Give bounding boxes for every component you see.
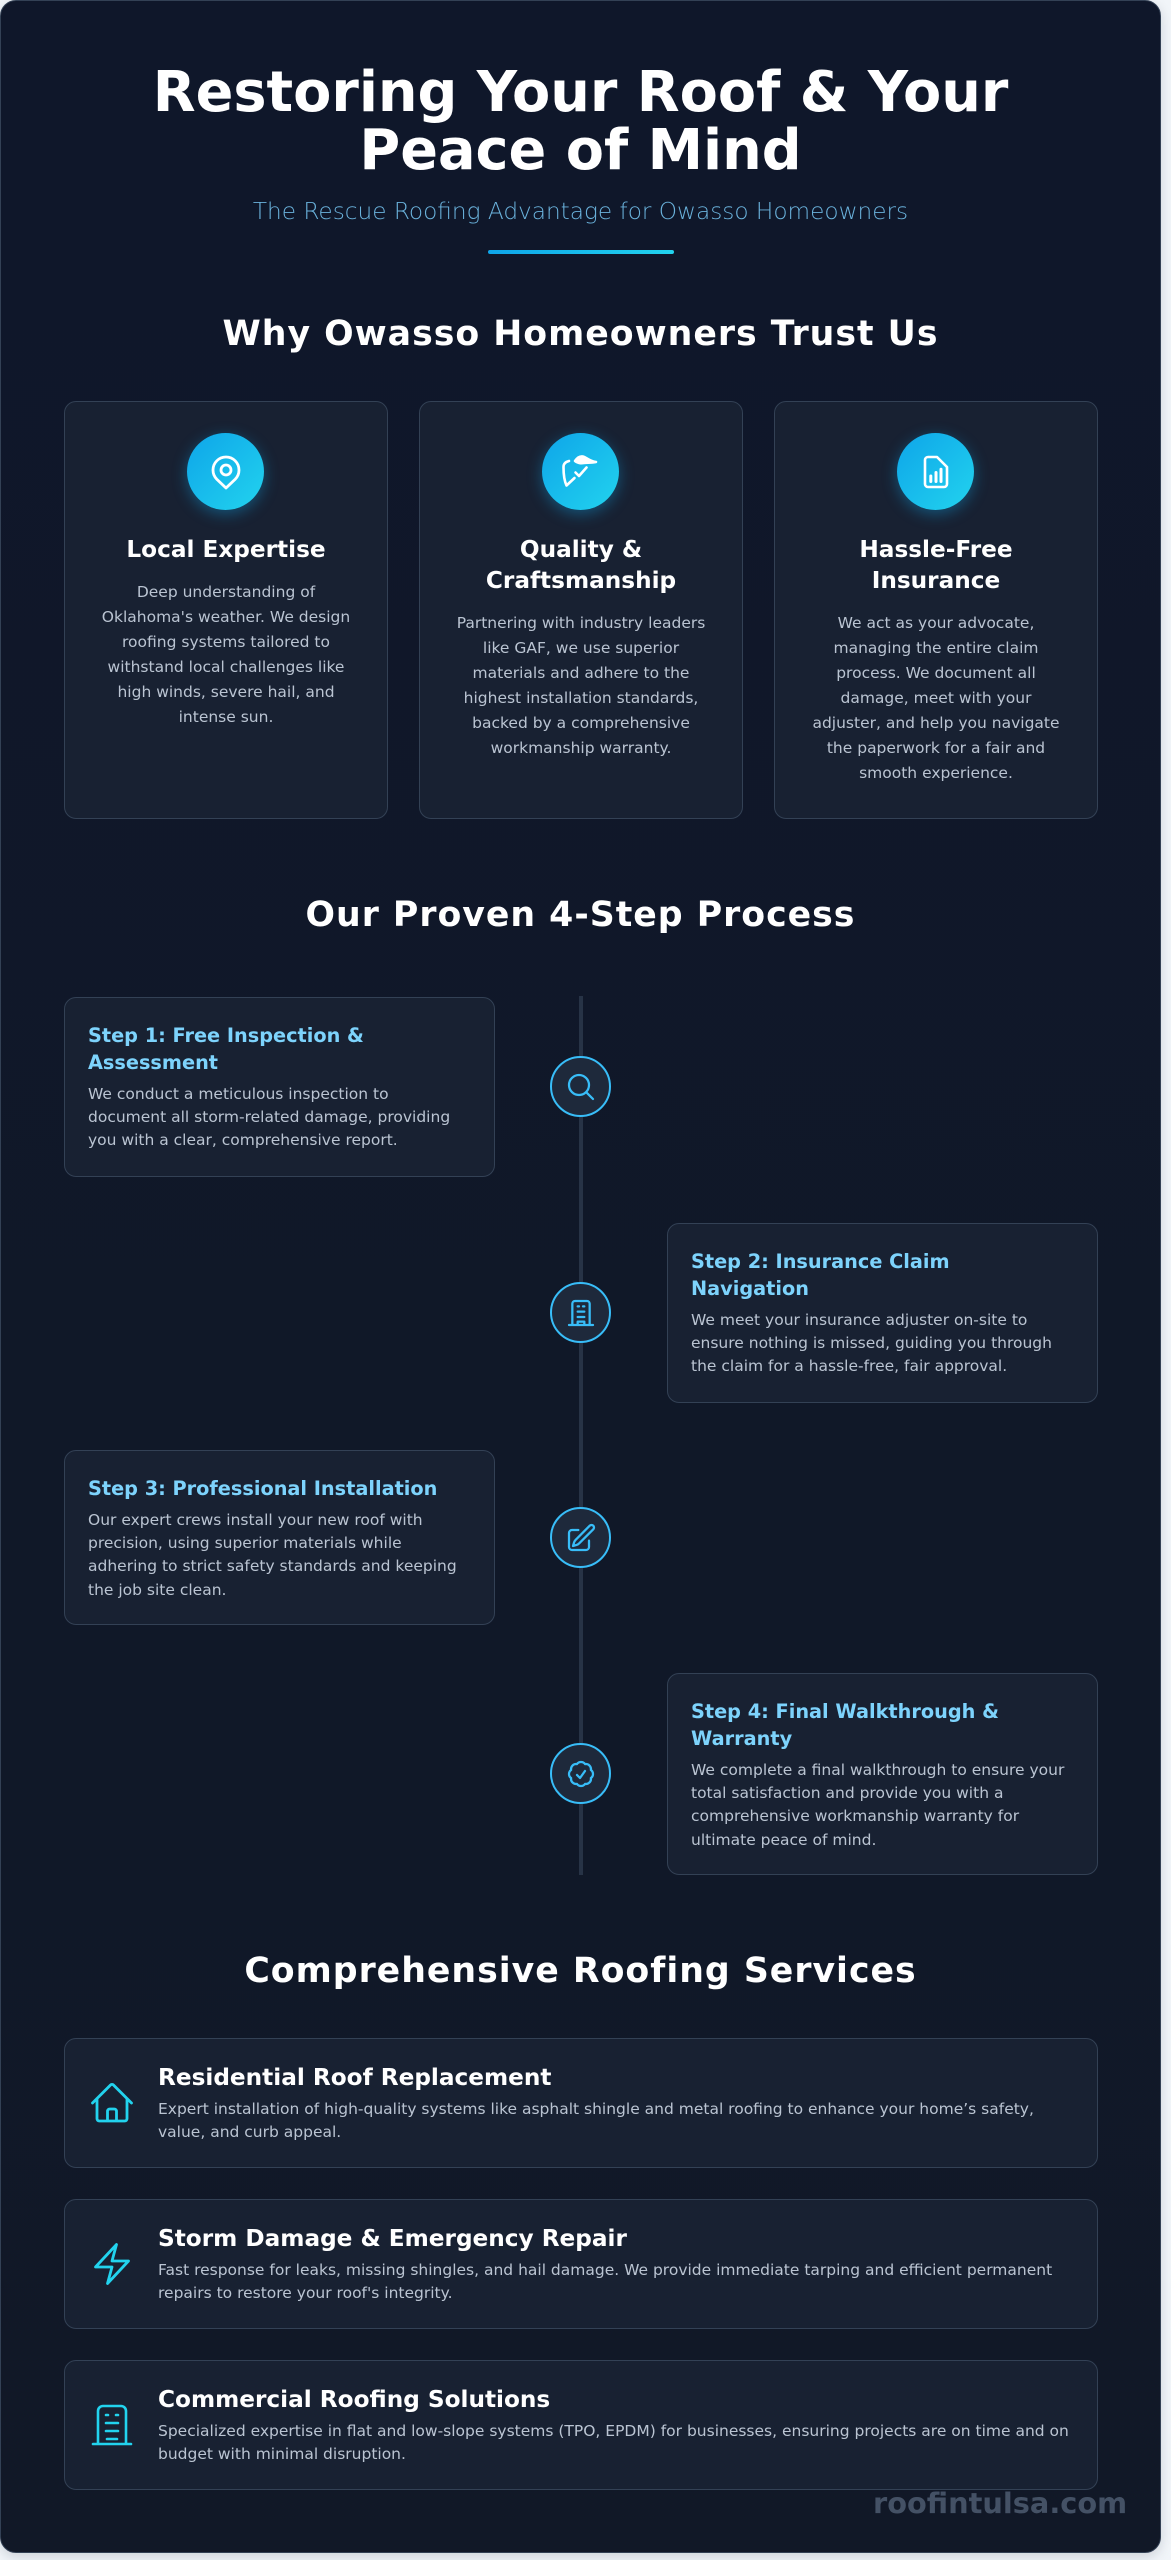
step text: the job site clean. — [88, 1581, 226, 1599]
service title: Commercial Roofing Solutions — [158, 2386, 550, 2413]
step title — [691, 1700, 999, 1750]
step text — [88, 1085, 450, 1149]
panel: hassle-free insurance — [774, 401, 1098, 819]
step 1 node: search icon — [550, 1056, 611, 1117]
title: Restoring Your Roof & Your — [153, 60, 1008, 125]
service text: Fast response for leaks, missing shingles, and hail damage. We provide immediate tarping and efficient permanent — [158, 2261, 1052, 2279]
card text: workmanship warranty. — [491, 739, 671, 757]
card text: materials and adhere to the — [473, 664, 689, 682]
step title: Assessment — [88, 1051, 218, 1074]
step 3 node: pencil icon — [550, 1507, 611, 1568]
icon: document with bar chart — [897, 433, 974, 510]
service title: Residential Roof Replacement — [158, 2064, 551, 2091]
card text: We act as your advocate, — [838, 614, 1034, 632]
icon: shield with roof and check — [542, 433, 619, 510]
card text: highest installation standards, — [464, 689, 698, 707]
step text: you with a clear, comprehensive report. — [88, 1131, 398, 1149]
card text: roofing systems tailored to — [122, 633, 330, 651]
step text — [691, 1761, 1064, 1849]
card text: adjuster, and help you navigate — [812, 714, 1060, 732]
step title: Step 4: Final Walkthrough & — [691, 1700, 999, 1722]
step text: the claim for a hassle-free, fair approval. — [691, 1357, 1007, 1375]
step title: Step 1: Free Inspection & — [88, 1024, 364, 1047]
service text — [158, 2261, 1052, 2302]
icon: lightning bolt — [94, 2243, 130, 2285]
card heading: Hassle-Free — [859, 536, 1013, 563]
card text — [457, 614, 705, 757]
card text: damage, meet with your — [840, 689, 1032, 707]
card text: high winds, severe hail, and — [117, 683, 335, 701]
step text: comprehensive workmanship warranty for — [691, 1807, 1019, 1825]
card text: smooth experience. — [859, 764, 1013, 782]
title: Peace of Mind — [359, 118, 802, 183]
heading: process: Our Proven 4-Step Process — [306, 895, 855, 935]
card text: Deep understanding of — [137, 582, 315, 600]
step text: We complete a final walkthrough to ensure your — [691, 1761, 1064, 1779]
card text: managing the entire claim — [834, 639, 1038, 657]
watermark: roofintulsa.com — [873, 2486, 1127, 2520]
card heading: Craftsmanship — [486, 567, 676, 594]
card text: the paperwork for a fair and — [827, 739, 1045, 757]
service text: repairs to restore your roof's integrity. — [158, 2284, 452, 2302]
card text: Partnering with industry leaders — [457, 614, 705, 632]
step text: ultimate peace of mind. — [691, 1831, 876, 1849]
card text: intense sun. — [179, 708, 273, 726]
service text — [158, 2100, 1034, 2141]
step text: We meet your insurance adjuster on-site to — [691, 1311, 1027, 1329]
heading: services: Comprehensive Roofing Services — [244, 1951, 917, 1991]
icon: map pin — [187, 433, 264, 510]
card heading: Quality & — [520, 536, 642, 563]
card heading — [859, 536, 1013, 594]
step title: Warranty — [691, 1726, 792, 1750]
step text: document all storm-related damage, providing — [88, 1108, 450, 1126]
step 4 card — [667, 1673, 1098, 1875]
panel: quality and craftsmanship — [419, 401, 743, 819]
subtitle: The Rescue Roofing Advantage for Owasso Homeowners — [253, 198, 908, 225]
step text: We conduct a meticulous inspection to — [88, 1085, 389, 1103]
step 2 card — [667, 1223, 1098, 1403]
step 3 card — [64, 1450, 495, 1625]
step text: ensure nothing is missed, guiding you through — [691, 1334, 1052, 1352]
service text: value, and curb appeal. — [158, 2123, 341, 2141]
card text: backed by a comprehensive — [472, 714, 690, 732]
card text: process. We document all — [836, 664, 1036, 682]
accent divider — [488, 250, 674, 254]
step text — [88, 1511, 457, 1599]
step title — [88, 1024, 364, 1074]
service text: Specialized expertise in flat and low-slope systems (TPO, EPDM) for businesses, ensuring projects are on time and on — [158, 2422, 1069, 2440]
service text: budget with minimal disruption. — [158, 2445, 406, 2463]
card heading — [486, 536, 676, 594]
card text — [102, 582, 350, 726]
step 4 node: check badge icon — [550, 1743, 611, 1804]
icon: house — [91, 2083, 133, 2122]
step title: Navigation — [691, 1277, 809, 1300]
step title — [691, 1250, 950, 1300]
service title: Storm Damage & Emergency Repair — [158, 2225, 627, 2252]
timeline line — [578, 996, 582, 1875]
card text: withstand local challenges like — [108, 658, 344, 676]
card heading: Insurance — [872, 567, 1000, 594]
step text: Our expert crews install your new roof with — [88, 1511, 423, 1529]
title — [153, 60, 1008, 183]
heading: why trust us: Why Owasso Homeowners Trust Us — [222, 314, 938, 354]
card heading: Local Expertise — [126, 536, 326, 563]
card text: Oklahoma's weather. We design — [102, 608, 350, 626]
step title: Step 3: Professional Installation — [88, 1477, 437, 1500]
service: storm damage — [64, 2199, 1098, 2329]
step text: adhering to strict safety standards and keeping — [88, 1557, 457, 1575]
panel: local expertise — [64, 401, 388, 819]
step text — [691, 1311, 1052, 1375]
card text — [812, 614, 1060, 782]
step 1 card — [64, 997, 495, 1177]
service: residential — [64, 2038, 1098, 2168]
service text: Expert installation of high-quality systems like asphalt shingle and metal roofing to enhance your home’s safety, — [158, 2100, 1034, 2118]
step title: Step 2: Insurance Claim — [691, 1250, 950, 1273]
service: commercial — [64, 2360, 1098, 2490]
step text: total satisfaction and provide you with a — [691, 1784, 1003, 1802]
step 2 node: building icon — [550, 1282, 611, 1343]
service text — [158, 2422, 1069, 2463]
icon: office building — [92, 2404, 132, 2446]
step text: precision, using superior materials while — [88, 1534, 402, 1552]
card text: like GAF, we use superior — [483, 639, 679, 657]
